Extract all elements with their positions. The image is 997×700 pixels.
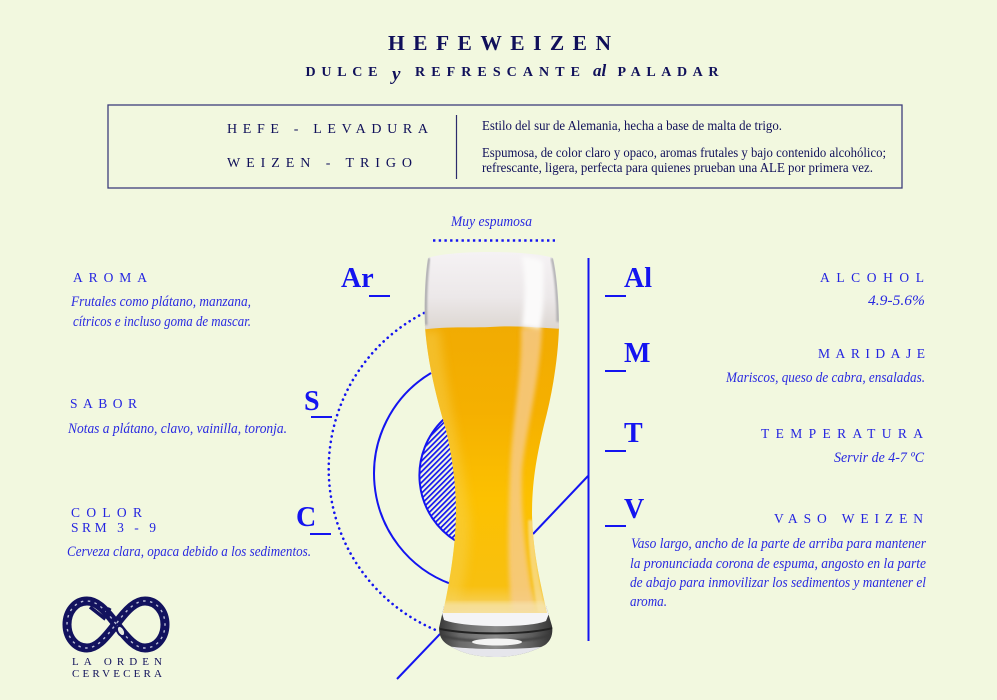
panel: aroma: Frutales como plátano, manzana, [70,294,251,310]
dotted arc [329,313,438,631]
subtitle: al [593,61,606,80]
panel: temperatura: Servir de 4-7 ºC [834,450,925,466]
glossary: hefe and weizen [227,122,429,171]
marker: Al [605,263,652,296]
panel: color: SRM 3 - 9 [71,520,156,535]
logo wordmark: CERVECERA [72,668,162,680]
subtitle [306,61,719,85]
panel: vaso weizen: aroma. [630,594,667,610]
panel: alcohol: 4.9-5.6% [868,293,925,309]
marker: C: C [296,502,316,533]
title: HEFEWEIZEN [388,31,611,55]
glossary: hefe and weizen: WEIZEN - TRIGO [227,156,412,171]
panel: temperatura: TEMPERATURA [761,426,923,441]
illustration: beer glass [420,248,565,660]
panel: temperatura [761,426,925,466]
style description [482,119,886,176]
panel: maridaje [725,346,925,386]
logo wordmark: LA ORDEN [72,656,162,668]
panel: vaso weizen: Vaso largo, ancho de la parte de arriba para mantener [631,536,926,552]
style description: Estilo del sur de Alemania, hecha a base de malta de trigo. [482,119,782,134]
marker: T [605,418,643,451]
vertical rule [588,258,590,641]
diagonal pointer lower [397,634,440,679]
panel: color: Cerveza clara, opaca debido a los sedimentos. [67,544,311,560]
hatched semicircle [419,420,500,541]
diagonal pointer upper [533,476,588,534]
panel: maridaje: Mariscos, queso de cabra, ensaladas. [725,370,925,386]
subtitle: PALADAR [618,65,719,80]
panel: aroma: AROMA [73,270,147,285]
style description: Espumosa, de color claro y opaco, aromas frutales y bajo contenido alcohólico; [482,146,886,161]
logo serpent infinity icon [67,601,165,648]
glossary: hefe and weizen: HEFE - LEVADURA [227,122,429,137]
panel: aroma [70,270,251,330]
marker: V: V [624,494,644,525]
marker: M [605,338,650,371]
marker: Ar [341,263,390,296]
solid arc [374,373,451,584]
panel: definition box [108,105,902,188]
style description: refrescante, ligera, perfecta para quienes prueban una ALE por primera vez. [482,161,873,176]
panel: vaso weizen: de abajo para inmovilizar los sedimentos y mantener el [630,575,926,591]
foam caption: Muy espumosa [450,214,532,230]
panel: aroma: cítricos e incluso goma de mascar. [73,314,251,330]
beer body [420,248,565,616]
panel: vaso weizen: VASO WEIZEN [774,511,923,526]
marker: V [605,494,644,526]
marker: T: T [624,418,643,449]
beer glass base [439,606,552,657]
subtitle: DULCE [306,65,378,80]
foam dotted line [433,239,555,242]
panel: alcohol: ALCOHOL [820,270,924,285]
marker: S [304,386,332,417]
marker: M: M [624,338,650,369]
logo wordmark [72,656,162,680]
panel: alcohol [820,270,925,309]
beer foam [424,252,559,330]
marker: Ar: Ar [341,263,374,294]
panel: sabor: SABOR [70,396,137,411]
subtitle: REFRESCANTE [415,65,580,80]
panel: maridaje: MARIDAJE [818,346,925,361]
panel: sabor [67,396,287,437]
marker: S: S [304,386,320,417]
panel: color [67,505,311,560]
panel: vaso weizen [630,511,926,610]
panel: color: COLOR [71,505,142,520]
logo: La Orden Cervecera [67,601,165,680]
subtitle: y [390,64,401,85]
marker: Al: Al [624,263,652,294]
panel: vaso weizen: la pronunciada corona de espuma, angosto en la parte [630,556,926,572]
marker: C [296,502,331,534]
panel: sabor: Notas a plátano, clavo, vainilla, toronja. [67,421,287,437]
